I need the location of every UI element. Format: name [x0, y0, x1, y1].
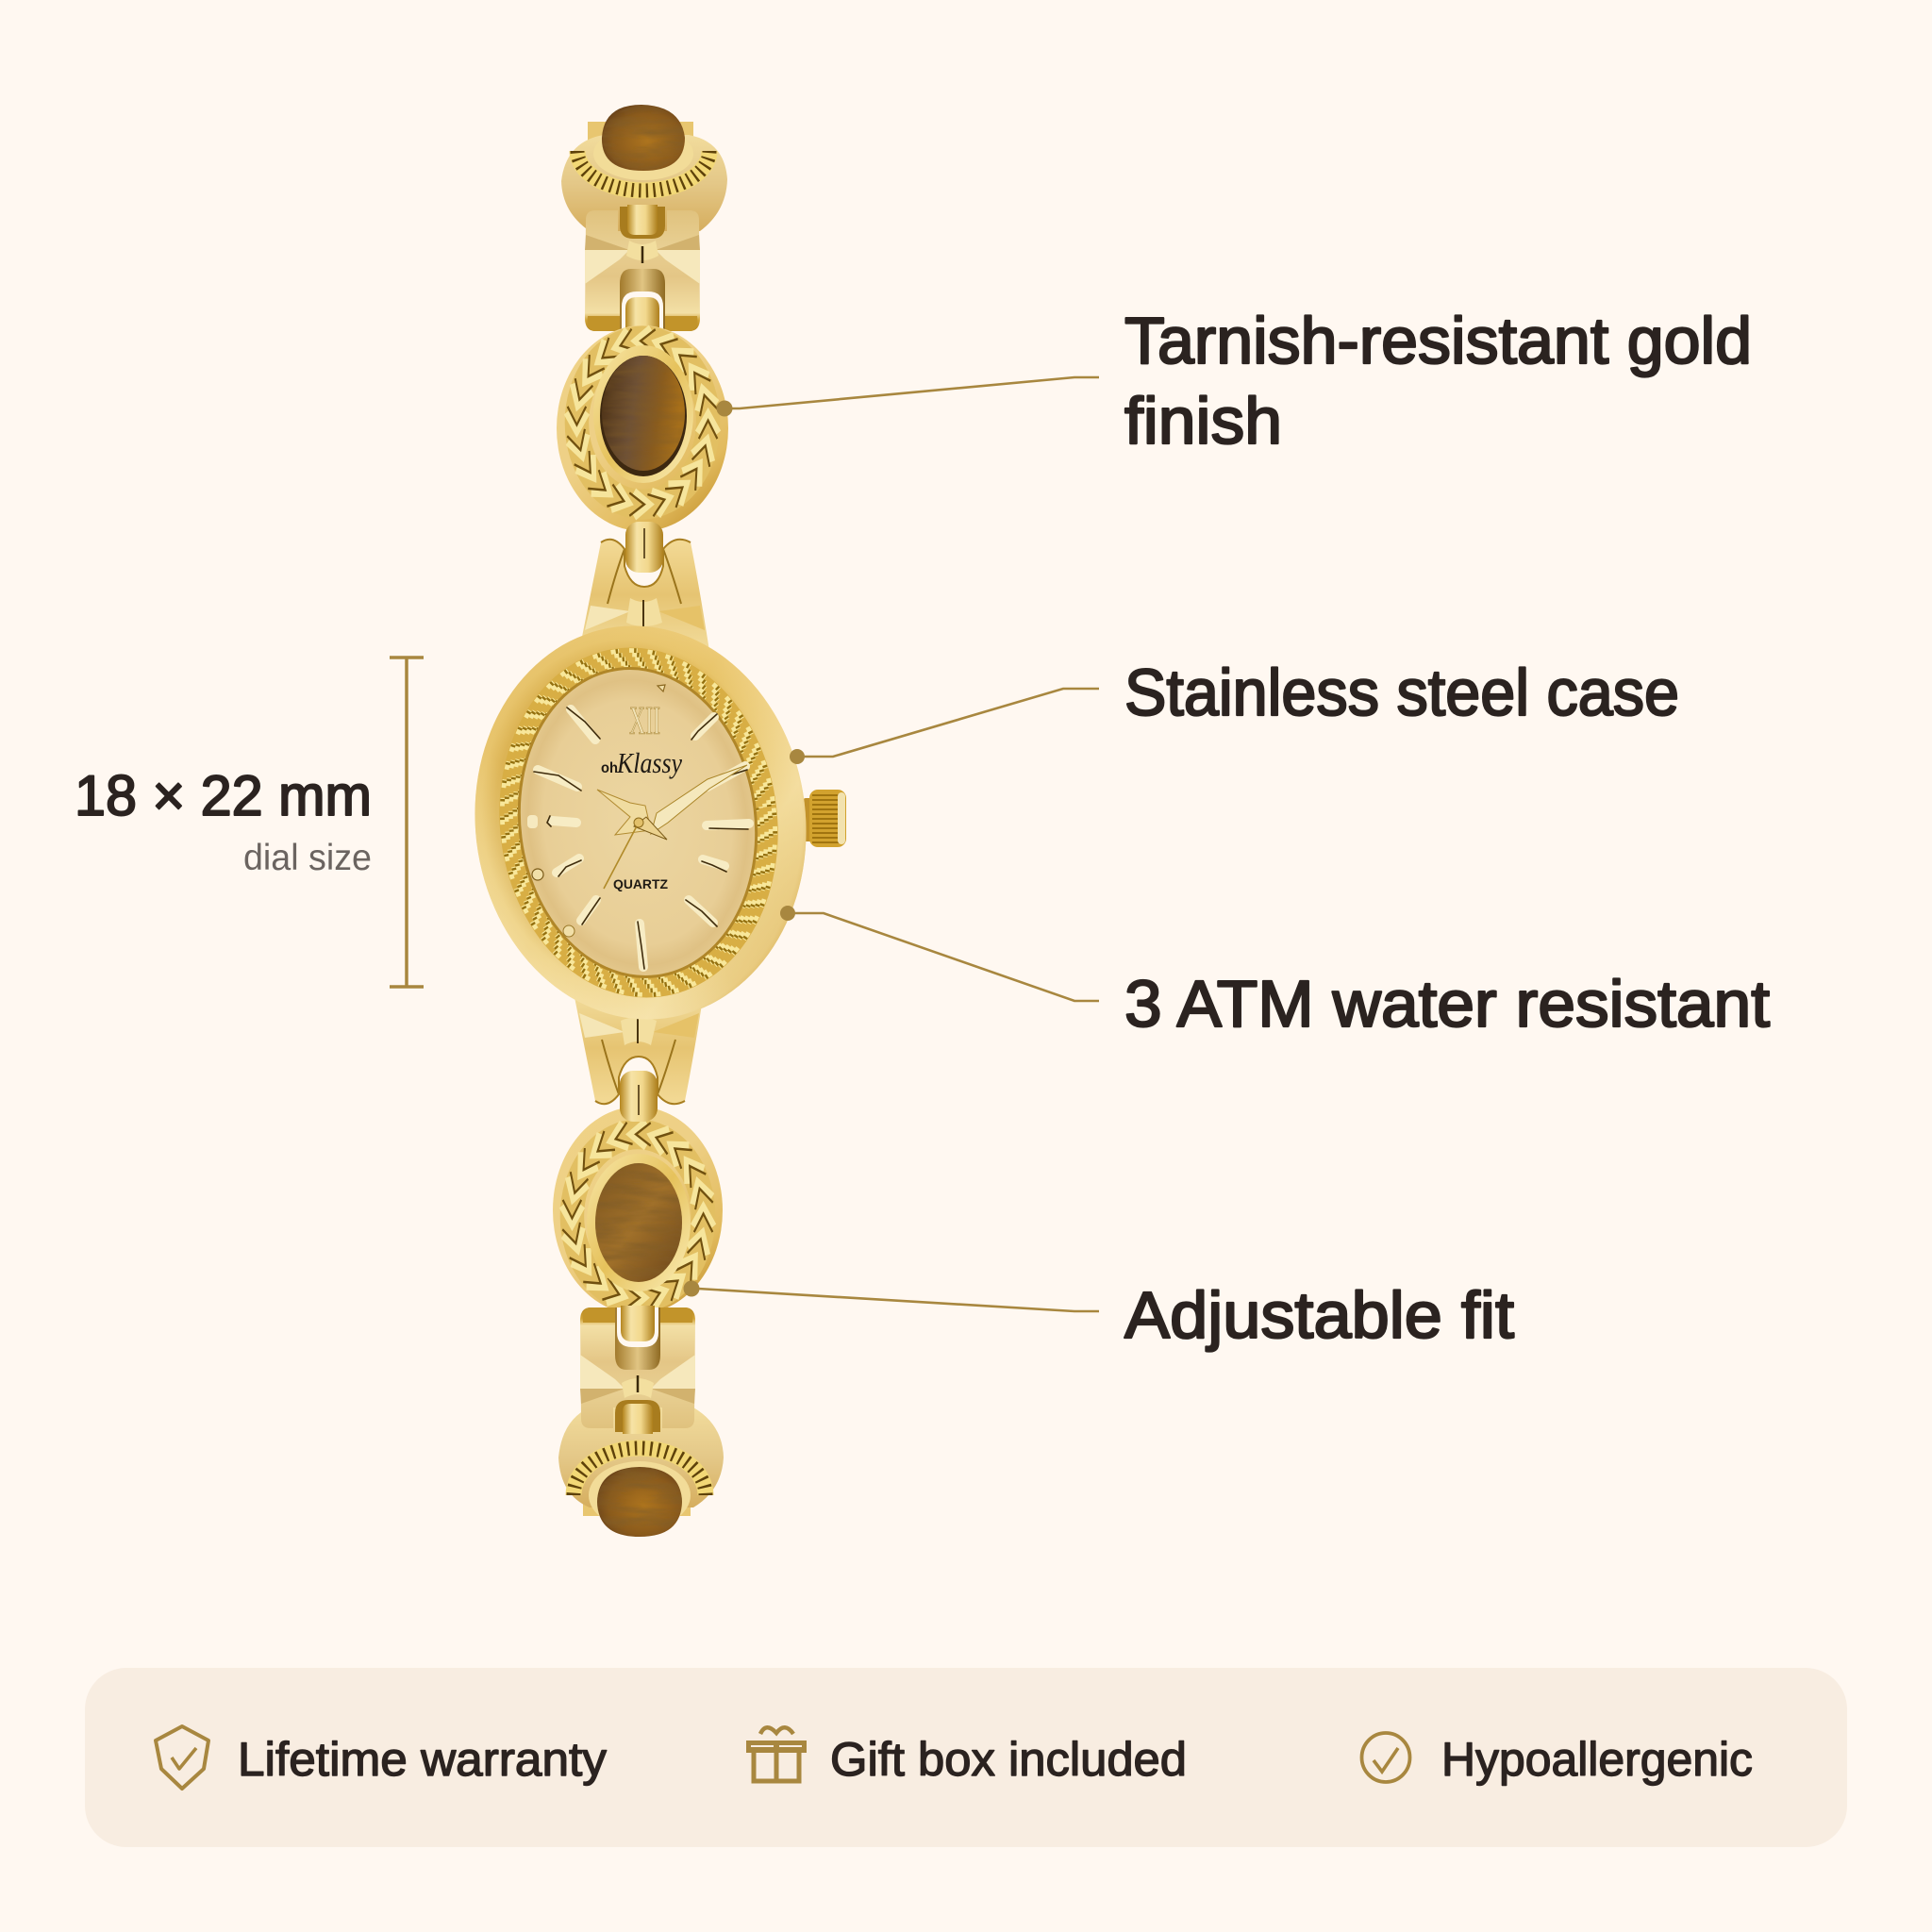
dial	[502, 655, 774, 991]
rope bezel	[483, 635, 794, 1010]
benefit: lifetime warranty: Lifetime warranty	[238, 1733, 607, 1786]
benefit: lifetime warranty	[156, 1726, 607, 1789]
callout: stainless steel case	[790, 656, 1679, 764]
top end link with tiger eye stone	[561, 105, 727, 231]
case	[453, 607, 828, 1039]
callout: adjustable fit: Adjustable fit	[1124, 1278, 1514, 1352]
crown	[803, 790, 846, 847]
dimension bracket	[390, 658, 424, 987]
bow link upper	[585, 205, 700, 333]
numeral XII: XII	[629, 700, 660, 743]
callout: tarnish-resistant gold finish: Tarnish-resistant gold	[1124, 304, 1752, 377]
callout: adjustable fit	[683, 1278, 1514, 1352]
dial dots	[527, 685, 665, 937]
watch illustration	[453, 105, 846, 1537]
benefit: gift box included: Gift box included	[830, 1733, 1187, 1786]
lug and connector top	[579, 522, 709, 651]
quartz label: QUARTZ	[613, 876, 668, 891]
callout: tarnish-resistant gold finish	[717, 304, 1752, 458]
callout: 3 ATM water resistant	[780, 906, 1770, 1041]
callout: 3 ATM water resistant: 3 ATM water resistant	[1124, 967, 1770, 1041]
brand logo: Klassy	[616, 746, 682, 779]
icon: shield check	[156, 1726, 208, 1789]
benefit: hypoallergenic: Hypoallergenic	[1441, 1733, 1753, 1786]
oval link lower with tiger eye stone	[553, 1107, 723, 1314]
callout: tarnish-resistant gold finish: finish	[1124, 384, 1282, 458]
panel: benefits bar	[85, 1668, 1847, 1847]
oval link upper with tiger eye stone	[557, 325, 728, 531]
brand logo	[601, 746, 682, 779]
hour markers	[534, 708, 749, 969]
bottom end link with tiger eye stone	[558, 1407, 724, 1537]
hands	[597, 765, 747, 889]
icon: circle check	[1362, 1733, 1409, 1782]
icon: gift box	[746, 1727, 807, 1781]
dial size value: 18 × 22 mm	[75, 764, 372, 827]
callout: stainless steel case: Stainless steel case	[1124, 656, 1679, 729]
lug and connector bottom	[574, 992, 704, 1122]
bow link lower	[580, 1306, 695, 1434]
dial size measurement	[75, 658, 424, 987]
dial size caption: dial size	[243, 838, 372, 878]
brand logo: oh	[601, 760, 618, 776]
